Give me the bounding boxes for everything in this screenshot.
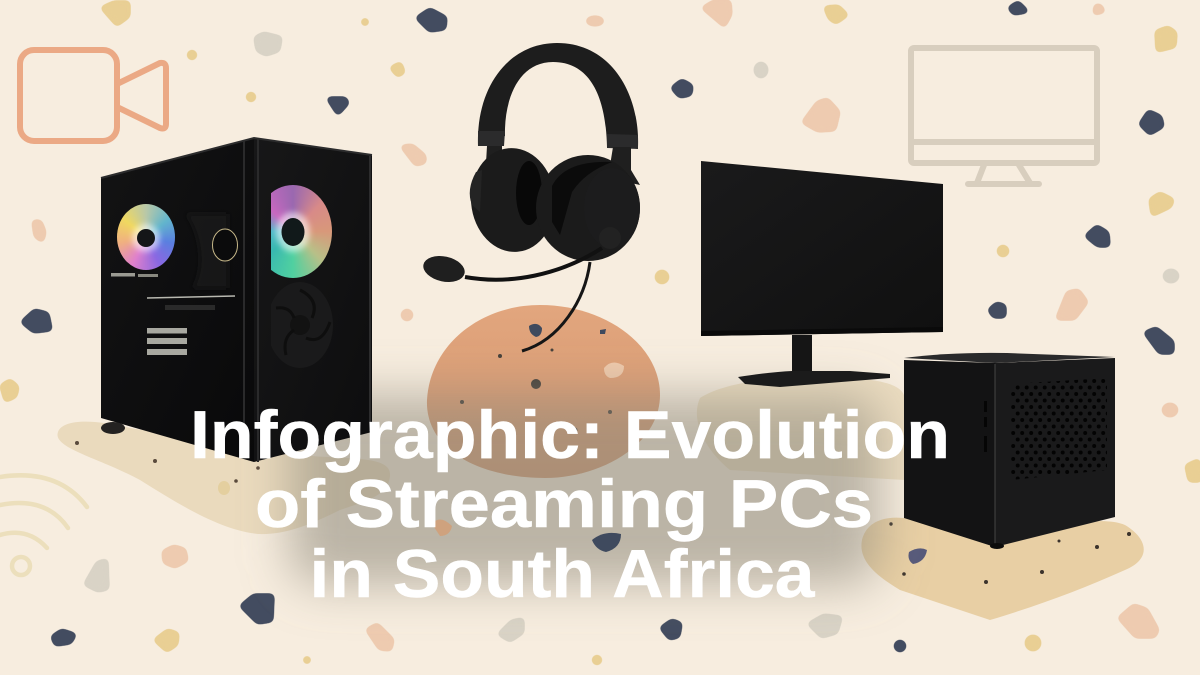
- peach rock pedestal: [427, 305, 660, 478]
- cable: [522, 262, 590, 351]
- terrazzo pieces near title: [432, 519, 621, 552]
- microphone boom: [465, 248, 602, 280]
- tan pedestal under mini PC: [861, 518, 1144, 620]
- tower graphics card and labels: [111, 273, 235, 355]
- tower PC: [101, 138, 372, 462]
- title line 1: Infographic: Evolution: [190, 397, 950, 473]
- headset: [421, 43, 640, 351]
- title line 3: in South Africa: [310, 536, 816, 612]
- tower left RGB fan: [117, 204, 175, 270]
- monitor screen: [701, 161, 943, 336]
- tower right RGB fan: [271, 185, 332, 278]
- tower dark fan: [292, 290, 332, 368]
- tower small ring: [212, 229, 238, 261]
- right ear cup: [536, 155, 640, 261]
- tower right front panel: [254, 138, 372, 462]
- monitor stand: [792, 335, 812, 372]
- headband: [478, 43, 638, 147]
- monitor: [701, 161, 943, 387]
- mini PC: [904, 353, 1115, 549]
- microphone foam: [421, 252, 467, 286]
- icon: computer monitor: [911, 48, 1097, 184]
- title line 2: of Streaming PCs: [255, 466, 873, 542]
- tan pedestal under tower: [57, 422, 390, 534]
- left ear cup: [467, 145, 559, 255]
- tower left glass panel: [101, 138, 254, 462]
- icon: wifi signal: [0, 475, 87, 575]
- shadow behind title: [290, 395, 880, 585]
- mini PC vent holes: [1011, 378, 1107, 480]
- mini PC ports: [984, 401, 987, 452]
- icon: video camera: [20, 50, 166, 141]
- title: [190, 397, 950, 612]
- tan pedestal under monitor: [697, 378, 905, 480]
